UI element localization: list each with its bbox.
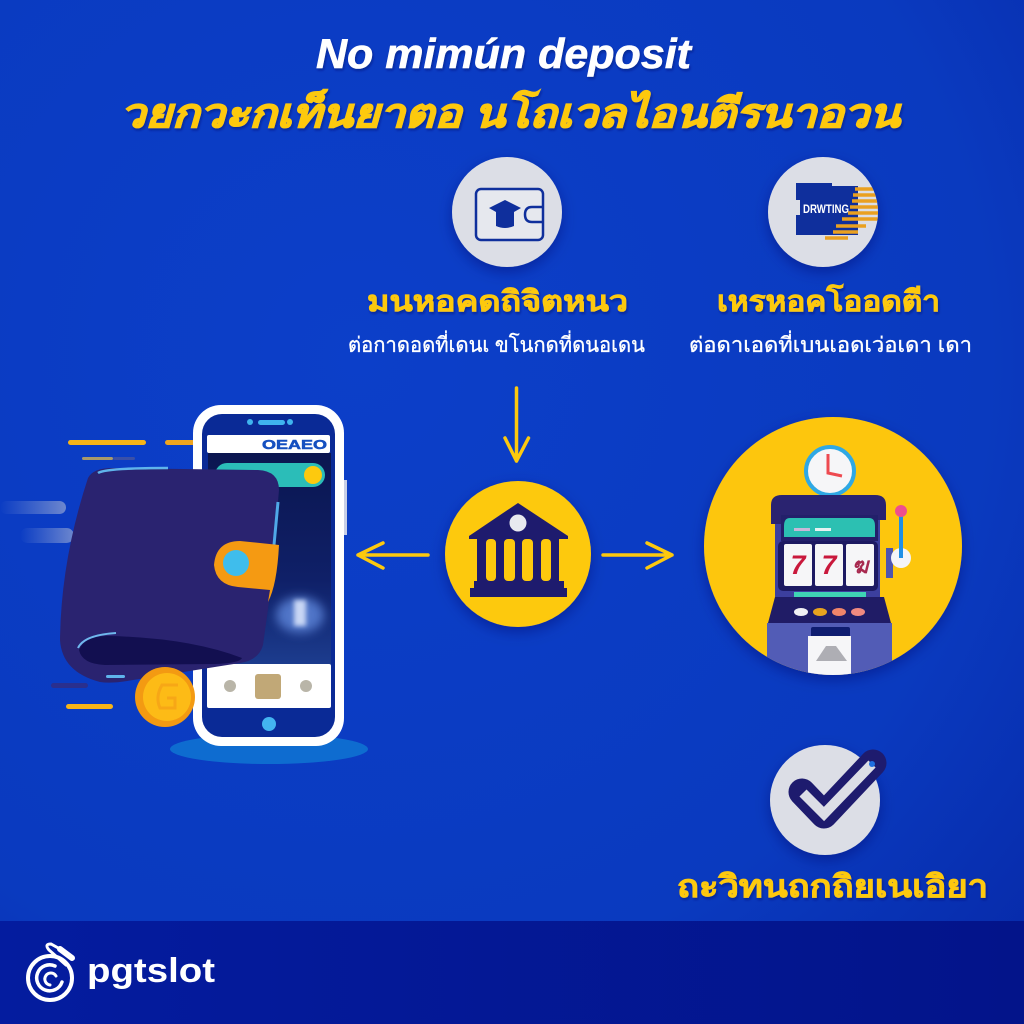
phone: [193, 405, 347, 746]
illustration: slot machine: [704, 417, 962, 683]
icon: check badge: [770, 745, 880, 855]
arrow: down to bank: [505, 388, 528, 461]
title: [120, 30, 902, 136]
heading: check result: ถะวิทนถกถิยเนเอิยา: [677, 869, 988, 904]
machine body: 7: [790, 550, 807, 580]
description: first option: ต่อกาดอดที่เดนเ ขโนกดที่ดนอเดน: [348, 330, 645, 357]
icon: card badge: DRWTING: [803, 202, 849, 216]
heading: first option: มนหอคดถิจิตหนว: [367, 286, 628, 318]
speed lines: [0, 440, 195, 709]
coin: [135, 667, 195, 727]
wallet: [60, 468, 279, 683]
illustration: phone and wallet: [0, 405, 368, 764]
machine body: [767, 495, 892, 683]
description: second option: ต่อดาเอดที่เบนเอดเว่อเดา เดา: [689, 330, 972, 357]
phone shadow ellipse: [170, 734, 368, 764]
clock: [806, 447, 854, 495]
footer bar: [0, 921, 1024, 1024]
icon: wallet badge: [452, 157, 562, 267]
heading: second option: เหรหอคโออดตีา: [717, 283, 940, 318]
machine body: ฆ: [852, 553, 871, 578]
icon: bank: [445, 481, 591, 627]
icon: card badge: [768, 157, 880, 267]
arrow: right to slot machine: [603, 543, 672, 568]
title line: thai: วยกวะกเท็นยาตอ นโถเวลไอนตีรนาอวน: [120, 89, 902, 136]
machine body: 7: [821, 550, 838, 580]
phone: OEAEO: [262, 437, 327, 452]
title line: english: No mimún deposit: [316, 30, 693, 77]
arrow: left to wallet: [358, 543, 428, 568]
logo mark: [28, 944, 72, 1000]
lever: [886, 505, 911, 578]
logo wordmark: pgtslot: [87, 952, 215, 990]
logo: [28, 944, 215, 1000]
